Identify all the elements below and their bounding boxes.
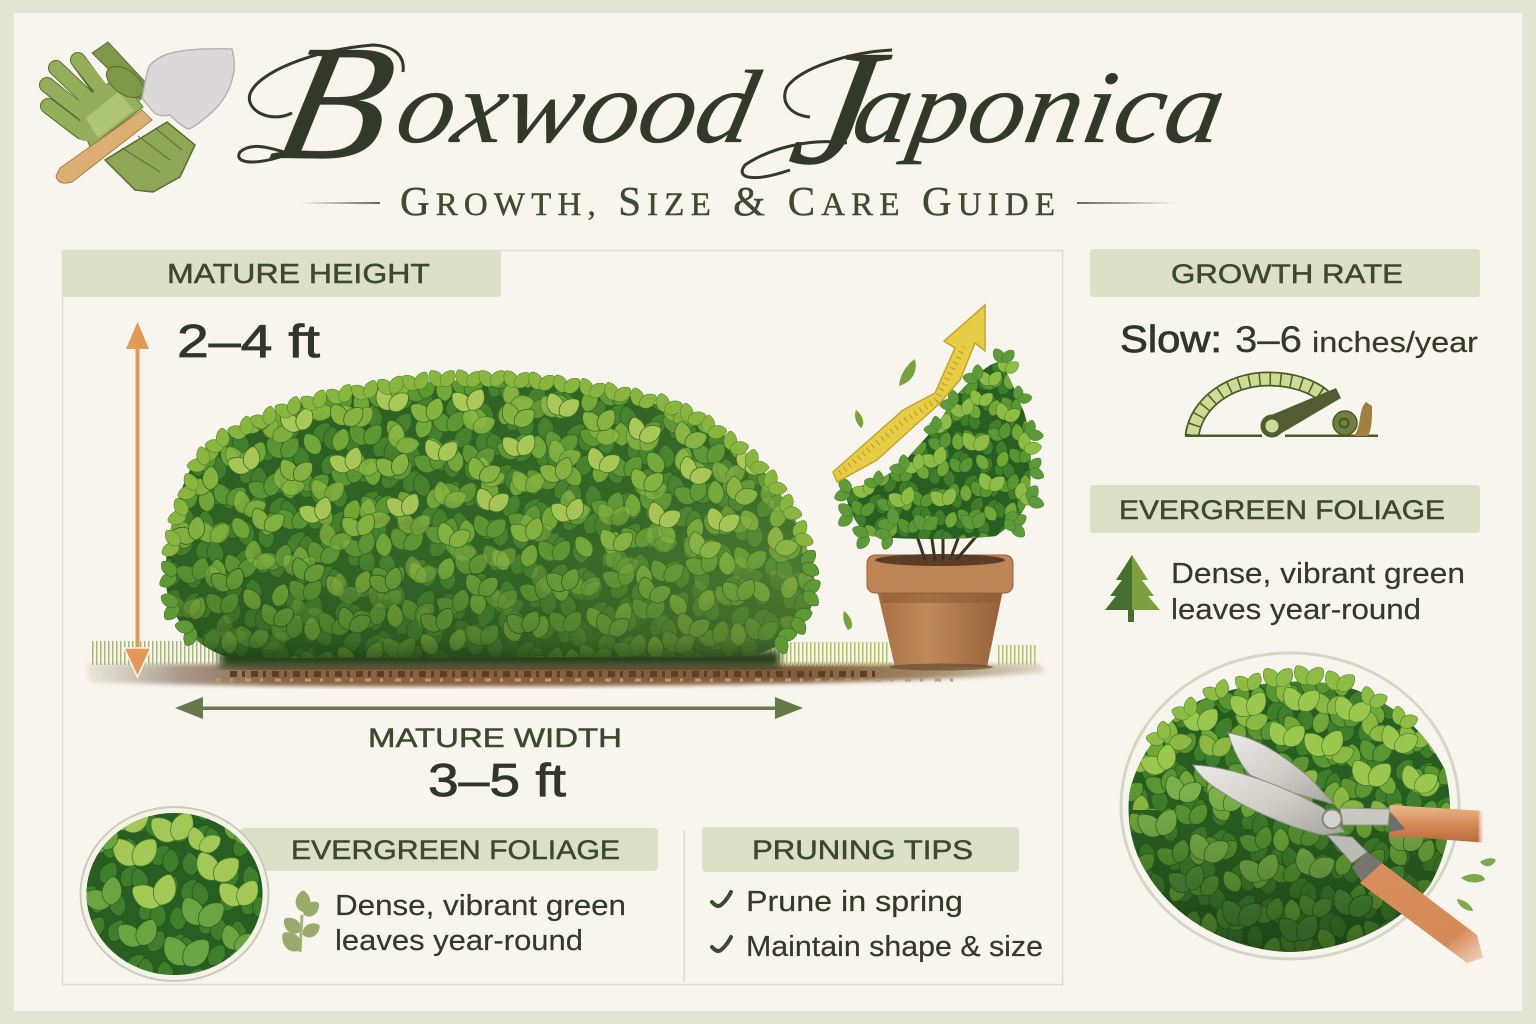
heading: growth rate: GROWTH RATE <box>1171 259 1403 289</box>
list: pruning tips <box>712 886 1043 963</box>
illustration: potted boxwood <box>825 340 1050 670</box>
icon: falling leaves <box>843 359 916 630</box>
text: foliage description <box>1171 558 1465 626</box>
image: pruning shears on foliage <box>1120 653 1494 963</box>
illustration: mature boxwood shrub <box>150 360 830 670</box>
text: foliage description: Dense, vibrant green <box>335 890 626 922</box>
heading: evergreen foliage <box>1090 485 1480 533</box>
heading: mature height: MATURE HEIGHT <box>167 258 430 289</box>
list: pruning tips: Maintain shape & size <box>746 931 1043 963</box>
list: pruning tips: Prune in spring <box>746 886 963 918</box>
image: foliage close-up <box>74 796 270 985</box>
label: mature width: MATURE WIDTH <box>368 723 622 753</box>
icon: slow gauge with snail <box>1185 379 1378 437</box>
heading: mature height <box>62 250 501 297</box>
icon: gloves and trowel <box>47 42 234 192</box>
heading: pruning tips: PRUNING TIPS <box>752 835 973 865</box>
arrow: height <box>124 322 151 677</box>
arrow: growth measuring tape <box>833 305 985 482</box>
heading: pruning tips <box>702 827 1019 872</box>
heading: evergreen foliage <box>240 828 658 871</box>
title <box>239 11 1240 199</box>
panel: growth rate <box>1090 249 1496 963</box>
text: foliage description: Dense, vibrant green <box>1171 558 1465 590</box>
arrow: width <box>175 697 803 719</box>
height value: 2–4 ft <box>177 315 320 367</box>
heading: evergreen foliage: EVERGREEN FOLIAGE <box>1119 495 1445 525</box>
ground <box>85 650 1045 687</box>
text: growth rate value: Slow: <box>1120 319 1222 361</box>
text: foliage description: leaves year-round <box>1171 594 1421 626</box>
text: foliage description <box>335 890 626 957</box>
icon: leaf sprig <box>277 891 323 956</box>
subtitle: GROWTH, SIZE & CARE GUIDE <box>400 178 1055 224</box>
heading: evergreen foliage: EVERGREEN FOLIAGE <box>291 835 620 865</box>
title: J <box>780 16 893 199</box>
title: oxwood <box>387 50 768 165</box>
panel: plant size <box>62 250 1062 985</box>
text: foliage description: leaves year-round <box>335 925 583 957</box>
title: aponica <box>845 49 1234 165</box>
icon: clipped leaves <box>1457 858 1496 911</box>
heading: growth rate <box>1090 249 1480 297</box>
width value: 3–5 ft <box>428 754 566 806</box>
text: growth rate value <box>1120 319 1478 361</box>
icon: evergreen tree <box>1105 555 1160 622</box>
title: B <box>260 11 410 194</box>
text: growth rate value: inches/year <box>1312 327 1478 359</box>
text: growth rate value: 3–6 <box>1235 319 1302 360</box>
